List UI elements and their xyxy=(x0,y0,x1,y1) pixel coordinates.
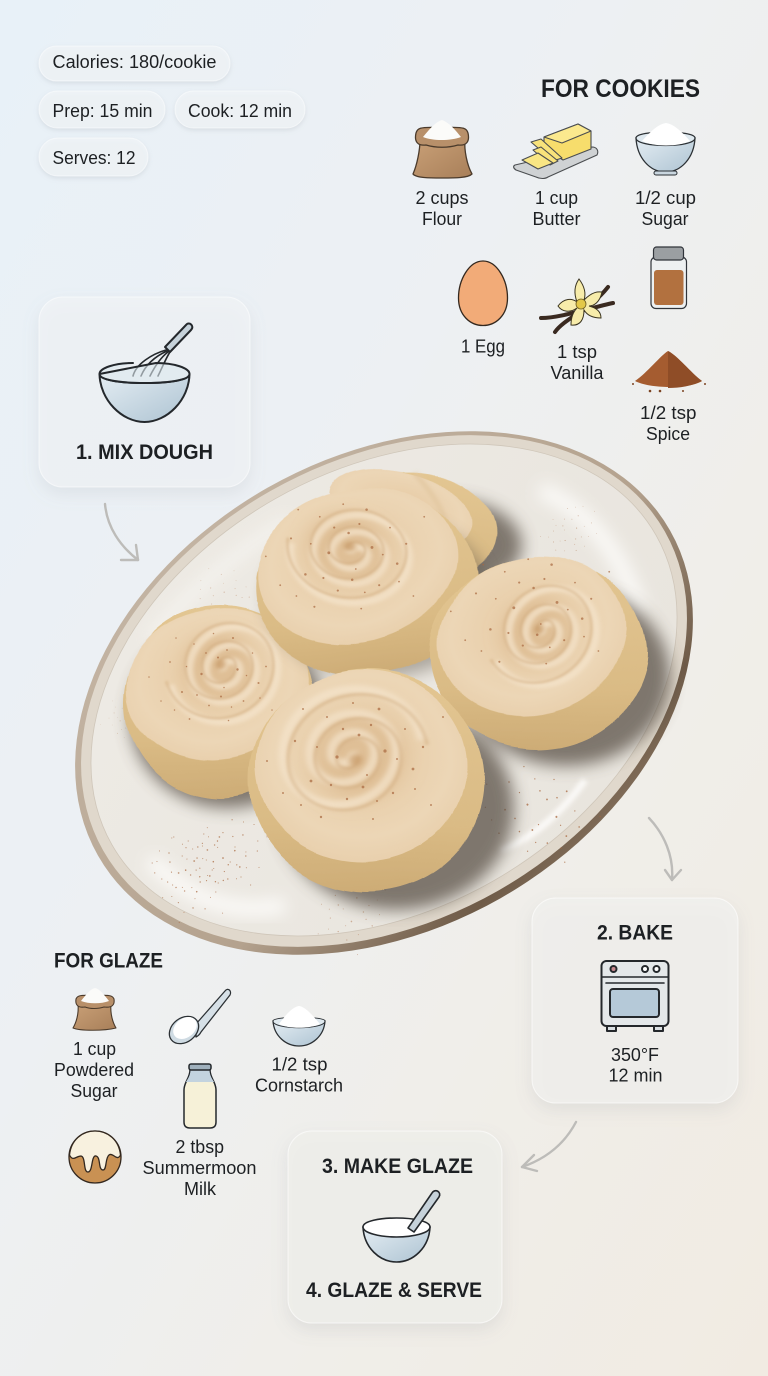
ingredient: powdered sugar: Sugar xyxy=(70,1081,118,1101)
cookie: right xyxy=(420,535,647,748)
heading: for glaze: FOR GLAZE xyxy=(54,950,163,972)
ingredient: milk: 2 tbsp xyxy=(176,1137,224,1157)
cookie: back xyxy=(321,455,506,591)
ingredient: powdered sugar: Powdered xyxy=(54,1060,134,1080)
panel: step 1 mix dough xyxy=(39,297,250,487)
arrow: step 2 to step 3 xyxy=(522,1122,576,1171)
ingredient: flour: 2 cups xyxy=(416,188,468,208)
ingredient: powdered sugar xyxy=(54,988,134,1101)
icon: measuring spoon xyxy=(164,989,231,1049)
ingredient: sugar xyxy=(635,123,696,229)
pill: cook time xyxy=(175,91,305,128)
ingredient: spice: Spice xyxy=(646,424,690,444)
ingredient: cornstarch: Cornstarch xyxy=(255,1076,343,1096)
panel: step 2 bake: 2. BAKE xyxy=(597,922,673,944)
ingredient: spice: 1/2 tsp xyxy=(640,403,696,423)
icon: flour sack xyxy=(413,120,472,178)
panel: step 2 bake: 12 min xyxy=(608,1066,662,1086)
speckles on plate xyxy=(98,495,608,958)
icon: oven xyxy=(602,961,668,1031)
pill: cook time: Cook: 12 min xyxy=(188,101,292,121)
ingredient: spice xyxy=(632,247,706,444)
ingredient: butter: Butter xyxy=(532,209,580,229)
panel: nutrition and timing pills xyxy=(39,46,305,176)
ingredient: flour xyxy=(413,120,472,229)
icon: spice jar xyxy=(651,247,686,308)
ingredient: flour: Flour xyxy=(422,209,462,229)
pill: serves: Serves: 12 xyxy=(52,148,136,168)
panel: step 2 bake: 350°F xyxy=(611,1045,659,1065)
pill: serves xyxy=(39,138,148,176)
arrow: plate to step 2 xyxy=(649,818,681,880)
ingredient: cornstarch xyxy=(255,1006,343,1096)
heading: for cookies: FOR COOKIES xyxy=(541,75,700,103)
cookie: top centre xyxy=(239,468,486,687)
ingredient: butter xyxy=(514,124,598,229)
panel: step 2 bake xyxy=(532,898,738,1103)
ingredient: egg: 1 Egg xyxy=(461,336,505,356)
panel: steps 3 and 4 glaze xyxy=(288,1131,502,1323)
ingredient: sugar: Sugar xyxy=(642,209,688,229)
ingredient: vanilla: Vanilla xyxy=(550,363,604,383)
plate xyxy=(0,325,768,1061)
ingredient: vanilla: 1 tsp xyxy=(557,342,597,362)
pill: calories: Calories: 180/cookie xyxy=(52,52,216,72)
ingredient: milk xyxy=(142,1064,256,1199)
ingredient: cornstarch: 1/2 tsp xyxy=(272,1054,328,1074)
icon: cornstarch bowl xyxy=(273,1006,325,1046)
cookie: left xyxy=(114,595,322,798)
pill: prep time: Prep: 15 min xyxy=(52,101,152,121)
ingredient: sugar: 1/2 cup xyxy=(635,188,696,208)
icon: powdered sugar sack xyxy=(73,988,116,1030)
ingredient: vanilla xyxy=(541,279,613,383)
icon: glaze bowl with spoon xyxy=(363,1191,440,1262)
icon: sugar bowl xyxy=(636,123,695,175)
panel: steps 3 and 4 glaze: 3. MAKE GLAZE xyxy=(322,1155,473,1178)
panel: steps 3 and 4 glaze: 4. GLAZE & SERVE xyxy=(306,1279,482,1302)
shadow under centre cookie xyxy=(266,514,490,678)
icon: bowl with whisk xyxy=(100,324,192,422)
icon: spice pile xyxy=(632,351,706,392)
ingredient: milk: Milk xyxy=(184,1179,217,1199)
panel: step 1 mix dough: 1. MIX DOUGH xyxy=(76,441,213,464)
arrow: step 1 to plate xyxy=(105,504,138,560)
cookie: front xyxy=(250,671,484,891)
icon: milk bottle xyxy=(184,1064,216,1128)
pill: prep time xyxy=(39,91,165,128)
icon: egg xyxy=(458,261,508,326)
plate with cookies xyxy=(0,325,768,1061)
ingredient: egg xyxy=(458,261,508,356)
ingredient: milk: Summermoon xyxy=(142,1158,256,1178)
pill: calories xyxy=(39,46,230,81)
cookie shadows xyxy=(130,499,670,910)
icon: butter on dish xyxy=(514,124,598,178)
ingredient: powdered sugar: 1 cup xyxy=(73,1039,116,1059)
icon: glazed cookie xyxy=(69,1131,121,1183)
ingredient: butter: 1 cup xyxy=(535,188,578,208)
icon: vanilla flower and pods xyxy=(541,279,613,332)
